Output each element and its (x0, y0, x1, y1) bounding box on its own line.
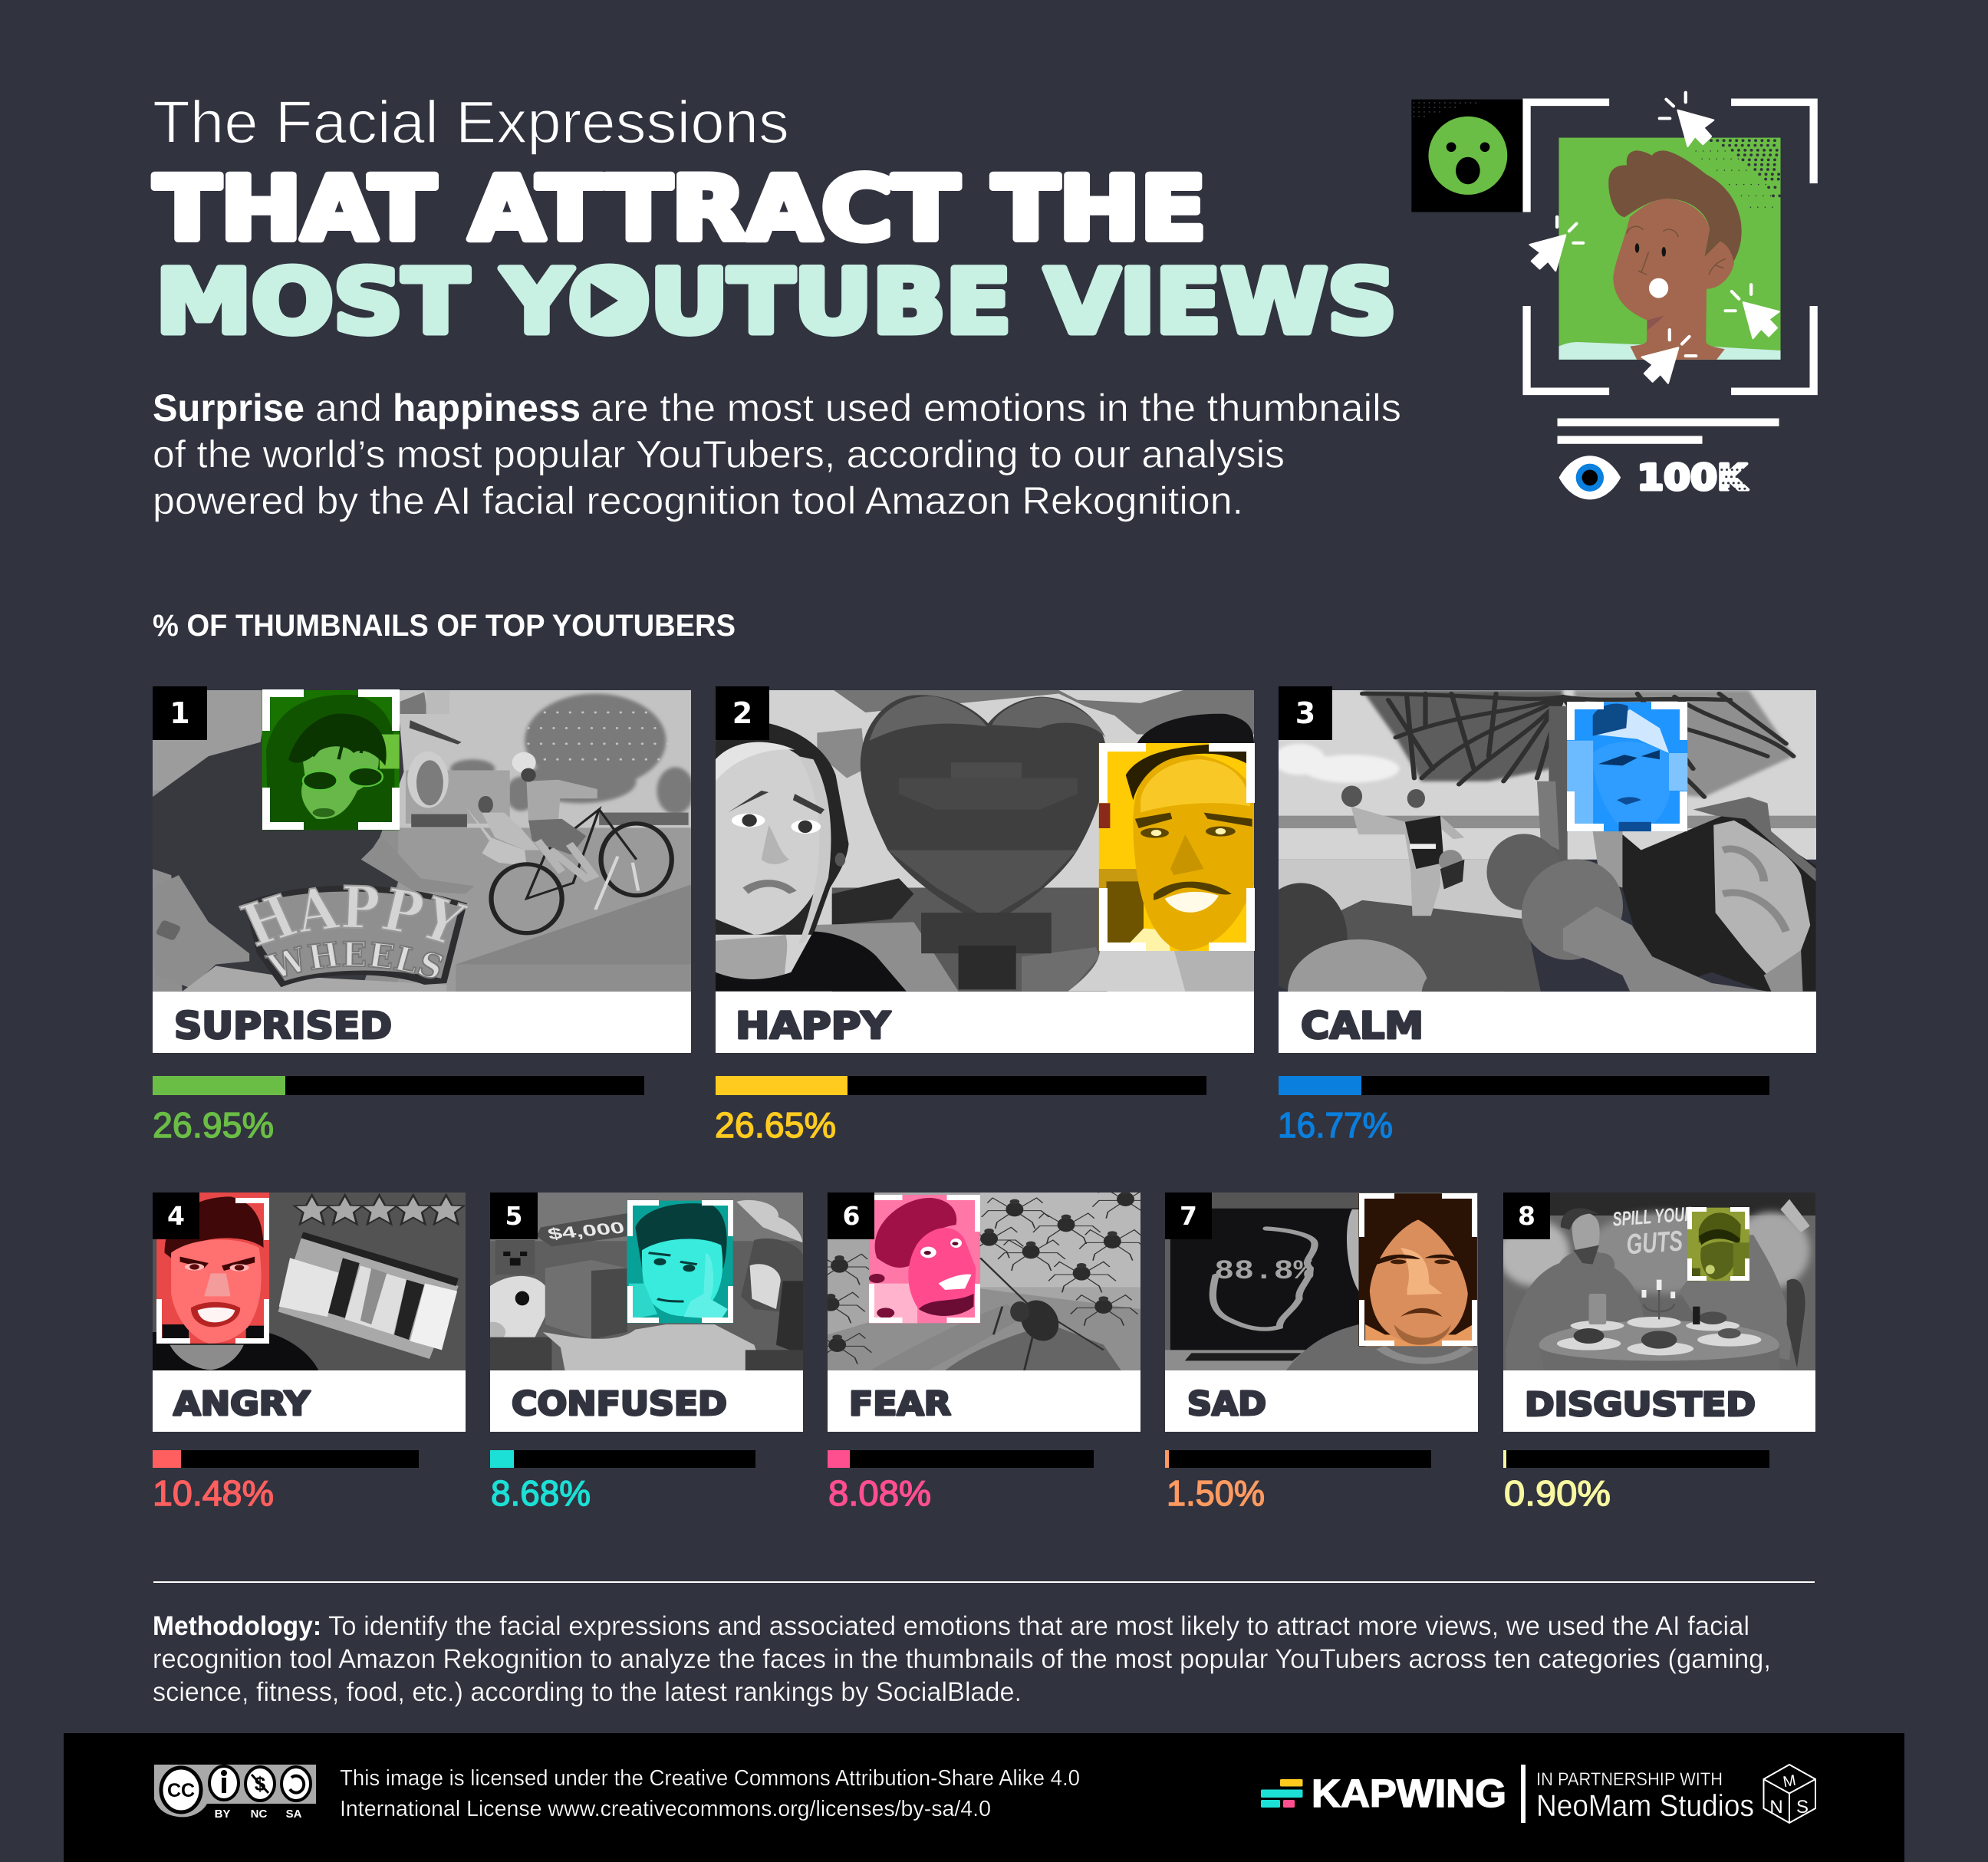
rank badge 3 (1279, 686, 1332, 740)
thumbnail: Minecraft heart (716, 690, 1254, 992)
view count 100K: 100K (1637, 458, 1749, 498)
intro paragraph: and (315, 387, 382, 429)
label bar: CONFUSED (490, 1370, 803, 1432)
Happy Wheels logo: HAPPY (238, 884, 468, 947)
face highlight: blue (1567, 702, 1687, 831)
rank badge 1 (153, 686, 207, 740)
face detection bracket (1103, 747, 1250, 946)
thumbnail: car and stars (153, 1193, 466, 1370)
thumbnail: laptop (1165, 1193, 1478, 1370)
value 26.95%: 26.95% (153, 1105, 274, 1145)
icon: NeoMam cube: N (1769, 1797, 1783, 1818)
methodology note (153, 1611, 1771, 1707)
card 5: confused (479, 1193, 803, 1513)
bar: 1.50% (1165, 1450, 1431, 1468)
rank badge 2 (716, 686, 769, 740)
face highlight: green (262, 690, 400, 830)
label bar: HAPPY: HAPPY (736, 1005, 891, 1048)
rank badge 7 (1165, 1193, 1212, 1239)
thumbnail: dinner table: SPILL YOUR (1612, 1202, 1695, 1231)
detection frame brackets (1527, 102, 1814, 391)
thumbnail: dinner table (1503, 1193, 1815, 1370)
methodology note: science, fitness, food, etc.) according to the latest rankings by SocialBlade. (153, 1677, 1022, 1707)
label bar: FEAR: FEAR (849, 1385, 951, 1423)
icon: Creative Commons badge: BY (215, 1808, 230, 1821)
card 8: disgusted (1498, 1193, 1815, 1513)
value 26.65%: 26.65% (715, 1105, 836, 1145)
bar: 10.48% (153, 1450, 419, 1468)
icon: Creative Commons badge: CC (167, 1780, 195, 1801)
bar: 26.65% (716, 1076, 1206, 1095)
icon: eye (1558, 456, 1621, 499)
intro paragraph (153, 387, 1401, 522)
label bar: ANGRY (153, 1370, 466, 1432)
rank badge 8 (1503, 1193, 1550, 1239)
label bar: ANGRY: ANGRY (173, 1385, 311, 1423)
footer panel (64, 1733, 1904, 1862)
methodology note: To identify the facial expressions and associated emotions that are most likely to attract more views, we used the AI facial (328, 1611, 1749, 1641)
thumbnail: laptop: 88.8% (1214, 1256, 1314, 1287)
license text: This image is licensed under the Creative Commons Attribution-Share Alike 4.0 (340, 1766, 1080, 1791)
value 10.48%: 10.48% (153, 1473, 274, 1513)
card 3: calm (1254, 686, 1816, 1145)
intro paragraph: are the most used emotions in the thumbnails (591, 387, 1401, 429)
Kapwing logo: KAPWING (1312, 1772, 1506, 1815)
value 1.50%: 1.50% (1167, 1473, 1265, 1513)
label bar: DISGUSTED (1503, 1370, 1815, 1432)
bar: 0.90% (1503, 1450, 1769, 1468)
value 8.08%: 8.08% (828, 1473, 931, 1513)
face detection bracket (266, 693, 396, 826)
card 7: sad (1165, 1193, 1478, 1513)
intro paragraph: Surprise (153, 387, 304, 429)
bar: 8.68% (490, 1450, 755, 1468)
rank badge 2: 2 (732, 696, 752, 730)
face detection bracket (1362, 1196, 1474, 1344)
face detection bracket (160, 1201, 267, 1341)
face highlight: orange (1358, 1193, 1477, 1346)
title placeholder lines (1558, 418, 1779, 444)
rank badge 4 (153, 1193, 199, 1239)
thumbnail: spiders (828, 1193, 1140, 1370)
thumbnail: Happy Wheels bike (153, 690, 691, 992)
license text: International License www.creativecommons.org/licenses/by-sa/4.0 (340, 1797, 991, 1821)
icon: play triangle in letter O (581, 275, 626, 327)
title line: THAT ATTRACT THE: THAT ATTRACT THE (154, 158, 1206, 259)
bar: 16.77% (1279, 1076, 1769, 1095)
rank badge 4: 4 (167, 1201, 185, 1231)
label bar: CONFUSED: CONFUSED (512, 1385, 727, 1423)
thumbnail: cube and toys: $4,000 (546, 1219, 627, 1243)
methodology note: Methodology: (153, 1611, 321, 1641)
card 4: angry (153, 1193, 466, 1513)
intro paragraph: happiness (393, 387, 581, 429)
rank badge 6: 6 (843, 1201, 860, 1231)
icon: NeoMam cube: M (1782, 1772, 1797, 1791)
face highlight: red (156, 1193, 269, 1344)
icon: cursors with click ticks (1530, 93, 1779, 383)
rank badge 8: 8 (1518, 1201, 1535, 1231)
methodology note: recognition tool Amazon Rekognition to analyze the faces in the thumbnails of the most popular YouTubers across ten categories (gaming, (153, 1644, 1771, 1674)
face highlight: teal (627, 1201, 733, 1323)
label bar: CALM: CALM (1301, 1005, 1424, 1048)
label bar: FEAR (828, 1370, 1140, 1432)
face detection bracket (1690, 1209, 1747, 1278)
title line: The Facial Expressions: The Facial Expressions (153, 88, 789, 156)
icon: Creative Commons badge: NC (251, 1808, 267, 1821)
intro paragraph: of the world’s most popular YouTubers, according to our analysis (153, 433, 1285, 475)
rank badge 7: 7 (1180, 1201, 1197, 1231)
label bar: SUPRISED: SUPRISED (174, 1005, 392, 1048)
NeoMam partnership text (1536, 1769, 1754, 1823)
value 16.77%: 16.77% (1278, 1105, 1393, 1145)
face highlight: olive (1687, 1208, 1749, 1281)
NeoMam partnership text: NeoMam Studios (1536, 1789, 1754, 1823)
thumbnail of cartoon face (1558, 138, 1781, 360)
thumbnail: dinner table: GUTS (1625, 1224, 1684, 1260)
icon: NeoMam cube (1764, 1765, 1815, 1823)
label bar: SAD: SAD (1187, 1385, 1266, 1423)
face detection bracket (630, 1202, 730, 1321)
rank badge 6 (828, 1193, 874, 1239)
label bar: CALM (1279, 992, 1816, 1053)
label bar: SUPRISED (153, 992, 691, 1053)
face detection bracket (871, 1198, 977, 1321)
face detection bracket (1571, 706, 1684, 827)
face highlight: pink (869, 1195, 980, 1323)
thumbnail: beach balloons (1279, 690, 1816, 992)
intro paragraph: powered by the AI facial recognition tool Amazon Rekognition. (153, 479, 1243, 522)
section heading: % OF THUMBNAILS OF TOP YOUTUBERS (153, 609, 736, 643)
license text (340, 1766, 1080, 1821)
card 2: happy (715, 686, 1255, 1145)
value 8.68%: 8.68% (491, 1473, 591, 1513)
title block (153, 88, 1397, 353)
icon: NeoMam cube: S (1796, 1797, 1809, 1818)
icon: surprised emoji tile (1411, 100, 1522, 212)
card 1: surprised (153, 686, 691, 1145)
rank badge 5: 5 (505, 1201, 522, 1231)
bar: 8.08% (828, 1450, 1094, 1468)
icon: Creative Commons badge: $ (255, 1772, 266, 1795)
label bar: HAPPY (716, 992, 1254, 1053)
Happy Wheels logo (238, 884, 468, 988)
icon: Creative Commons badge: SA (286, 1808, 302, 1821)
rank badge 1: 1 (170, 696, 190, 730)
icon: Creative Commons badge (154, 1765, 316, 1821)
Happy Wheels logo: WHEELS (264, 940, 444, 979)
rank badge 5 (490, 1193, 538, 1239)
thumbnail: cube and toys (490, 1193, 803, 1370)
hero illustration (1411, 93, 1814, 499)
label bar: SAD (1165, 1370, 1478, 1432)
title line: MOST YOUTUBE VIEWS: MOST YOUTUBE VIEWS (156, 251, 1397, 353)
value 0.90%: 0.90% (1504, 1473, 1611, 1513)
bar: 26.95% (153, 1076, 644, 1095)
face highlight: yellow (1099, 743, 1255, 951)
card 6: fear (798, 1188, 1160, 1513)
label bar: DISGUSTED: DISGUSTED (1525, 1386, 1756, 1424)
rank badge 3: 3 (1295, 696, 1315, 730)
NeoMam partnership text: IN PARTNERSHIP WITH (1536, 1769, 1723, 1790)
